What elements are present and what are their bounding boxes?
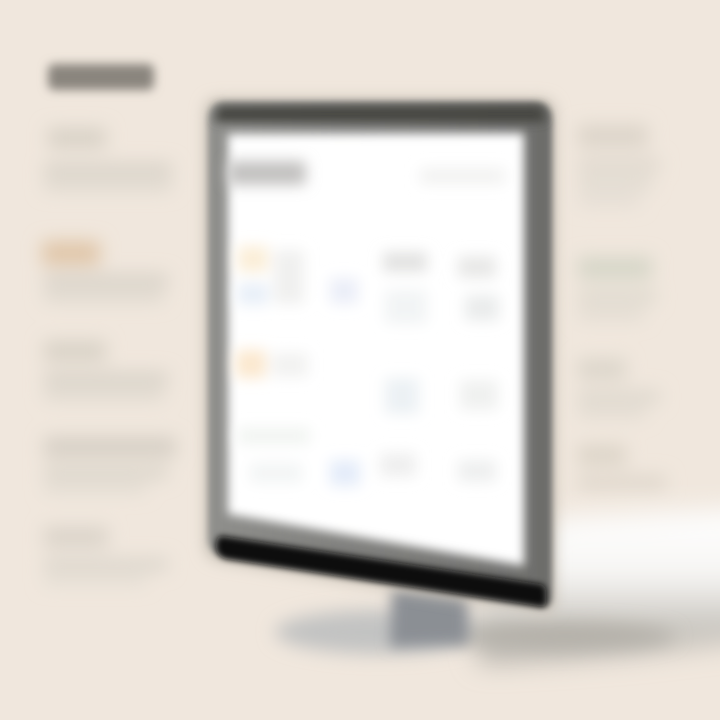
text block 7: [578, 257, 656, 320]
text block 1: [44, 128, 172, 191]
row 3 cells: [330, 453, 496, 486]
text block 5: [44, 527, 168, 585]
monitor stand neck: [390, 585, 468, 647]
text block 2: [42, 241, 168, 302]
soft outer shadow: [204, 98, 556, 614]
bottom bar: [216, 536, 546, 606]
left column: text blocks: [42, 128, 176, 585]
screen content: [228, 161, 505, 486]
row 1 cells: [238, 246, 499, 324]
right column: text blocks: [578, 125, 666, 490]
screen heading: [228, 161, 306, 185]
top bar: [214, 106, 546, 122]
text block 6: [578, 125, 660, 206]
title: Health: [48, 62, 154, 95]
screen header right: [420, 168, 505, 184]
text block 8: [578, 359, 660, 418]
row 2 cells: [236, 350, 498, 483]
shadow and white surface at right: [470, 508, 720, 664]
monitor: [204, 98, 556, 614]
bezel: [208, 102, 552, 608]
screen: [228, 133, 524, 566]
text block 3: [44, 341, 168, 400]
text block 9: [578, 445, 666, 490]
text block 4: [44, 437, 176, 493]
monitor stand base: [275, 610, 675, 654]
